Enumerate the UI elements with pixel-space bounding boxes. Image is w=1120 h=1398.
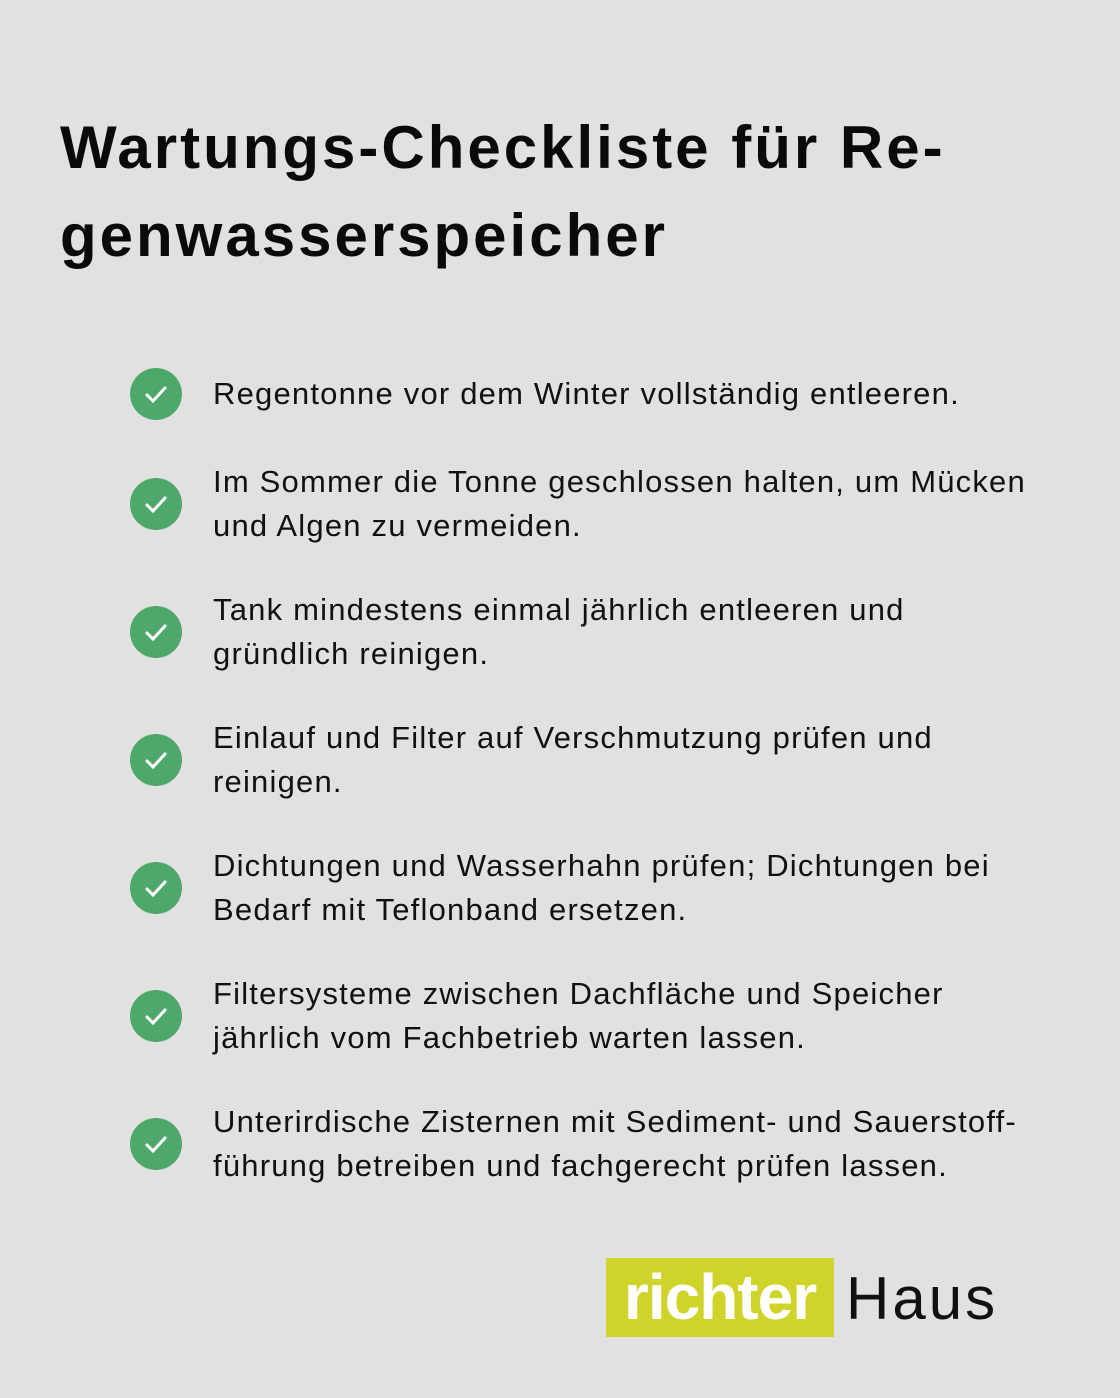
text: und Algen zu vermeiden. — [213, 508, 582, 543]
text: Bedarf mit Teflonband ersetzen. — [213, 892, 687, 927]
text: Tank mindestens einmal jährlich entleeren und — [213, 592, 905, 627]
logo — [606, 1258, 998, 1337]
text: Im Sommer die Tonne geschlossen halten, um Mücken — [213, 464, 1026, 499]
text: führung betreiben und fachgerecht prüfen lassen. — [213, 1148, 948, 1183]
item 5 — [130, 848, 990, 927]
item 6 — [130, 976, 944, 1055]
item 4 — [130, 720, 933, 799]
text: reinigen. — [213, 764, 343, 799]
title — [60, 114, 946, 269]
item 2 — [130, 464, 1026, 543]
text: Regentonne vor dem Winter vollständig entleeren. — [213, 376, 960, 411]
text: gründlich reinigen. — [213, 636, 489, 671]
logo box: richter — [624, 1261, 816, 1333]
item 3 — [130, 592, 905, 671]
title: genwasserspeicher — [60, 202, 668, 269]
text: Dichtungen und Wasserhahn prüfen; Dichtungen bei — [213, 848, 990, 883]
text: Einlauf und Filter auf Verschmutzung prüfen und — [213, 720, 933, 755]
item 1 — [130, 368, 960, 420]
logo text: Haus — [846, 1265, 998, 1332]
text: jährlich vom Fachbetrieb warten lassen. — [213, 1020, 806, 1055]
item 7 — [130, 1104, 1017, 1183]
text: Filtersysteme zwischen Dachfläche und Speicher — [213, 976, 944, 1011]
text: Unterirdische Zisternen mit Sediment- und Sauerstoff- — [213, 1104, 1017, 1139]
title: Wartungs-Checkliste für Re- — [60, 114, 946, 181]
